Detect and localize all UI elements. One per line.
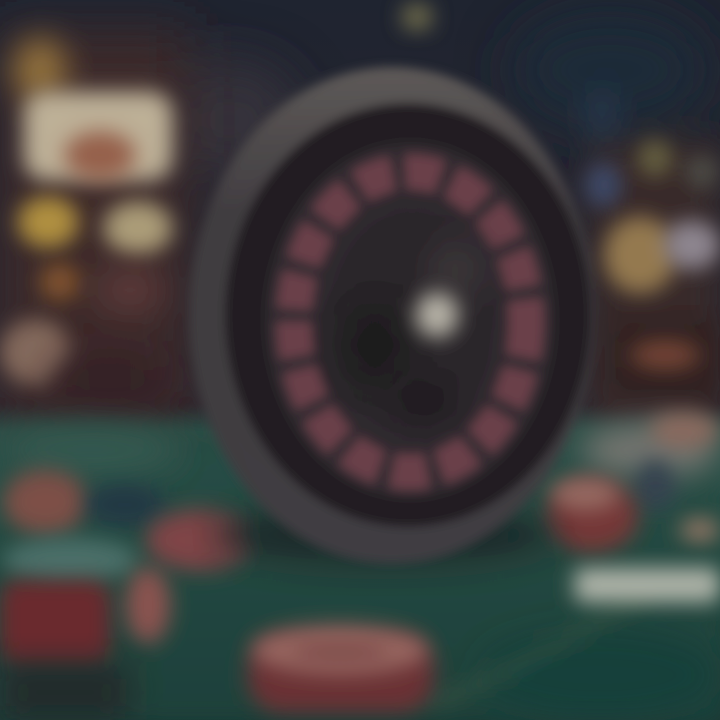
chip stack: front centre <box>248 626 434 713</box>
dark groove <box>225 103 591 527</box>
roulette wheel <box>189 67 595 565</box>
right casino lights <box>584 89 720 420</box>
centre hub <box>330 210 494 434</box>
left casino lights <box>0 30 190 420</box>
wheel shadow <box>215 505 555 565</box>
table: green felt details <box>0 412 720 720</box>
outer rim <box>189 67 595 563</box>
chips: right of wheel <box>546 478 638 552</box>
top light <box>401 3 433 31</box>
number ring <box>294 172 526 472</box>
centre glint <box>416 293 458 337</box>
chips: left stacks <box>0 470 254 720</box>
inner rim band <box>265 142 555 498</box>
background glows <box>160 10 710 180</box>
